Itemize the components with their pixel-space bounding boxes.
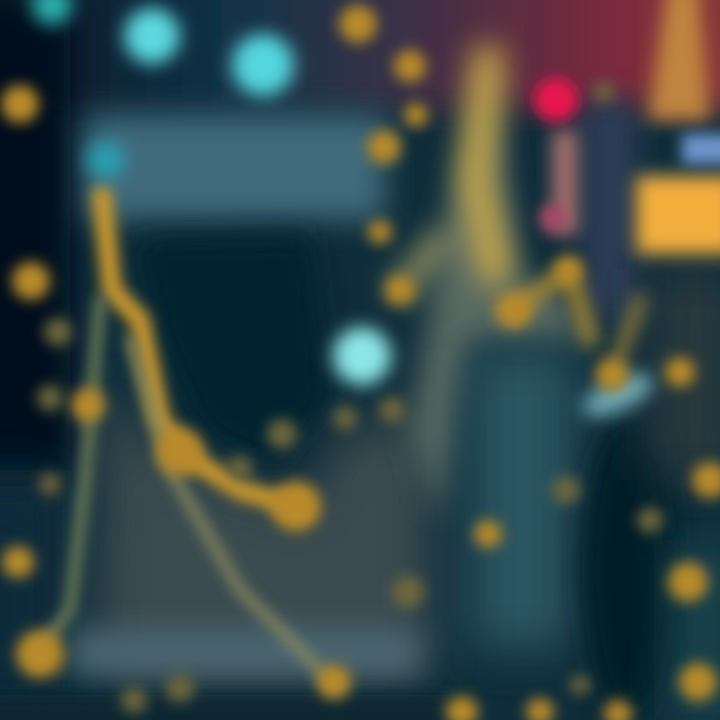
top band gradient bbox=[0, 0, 720, 110]
upper right mid band bbox=[585, 100, 635, 320]
orange tower top right bbox=[648, 0, 710, 120]
bottom grey-blue band bbox=[70, 630, 420, 675]
bottom dark band bbox=[0, 695, 450, 720]
left dark column bbox=[0, 0, 70, 480]
yellow trend line left bbox=[102, 195, 300, 508]
orange segments on right bbox=[510, 270, 640, 375]
lower grey chart area bbox=[95, 380, 430, 680]
cyan dots bbox=[32, 0, 391, 385]
right column teal bbox=[470, 350, 575, 650]
magenta dot bbox=[534, 78, 578, 122]
faint trend line branches bbox=[35, 300, 335, 685]
slate panel bbox=[85, 115, 385, 220]
right edge grey bbox=[650, 270, 720, 480]
yellow box bbox=[636, 176, 720, 254]
yellow dots dim bbox=[37, 82, 663, 713]
lower left teal column bbox=[0, 470, 65, 720]
central dark void bbox=[135, 235, 330, 470]
light cyan reflection bbox=[577, 364, 659, 426]
yellow trend line right bbox=[400, 60, 495, 290]
bottom right teal bbox=[670, 540, 720, 720]
pink dot lower bbox=[539, 204, 567, 232]
blue box bbox=[682, 134, 720, 164]
pink bar bbox=[552, 130, 578, 235]
lower right dark mass bbox=[582, 420, 678, 720]
middle grey tower bbox=[410, 70, 590, 520]
